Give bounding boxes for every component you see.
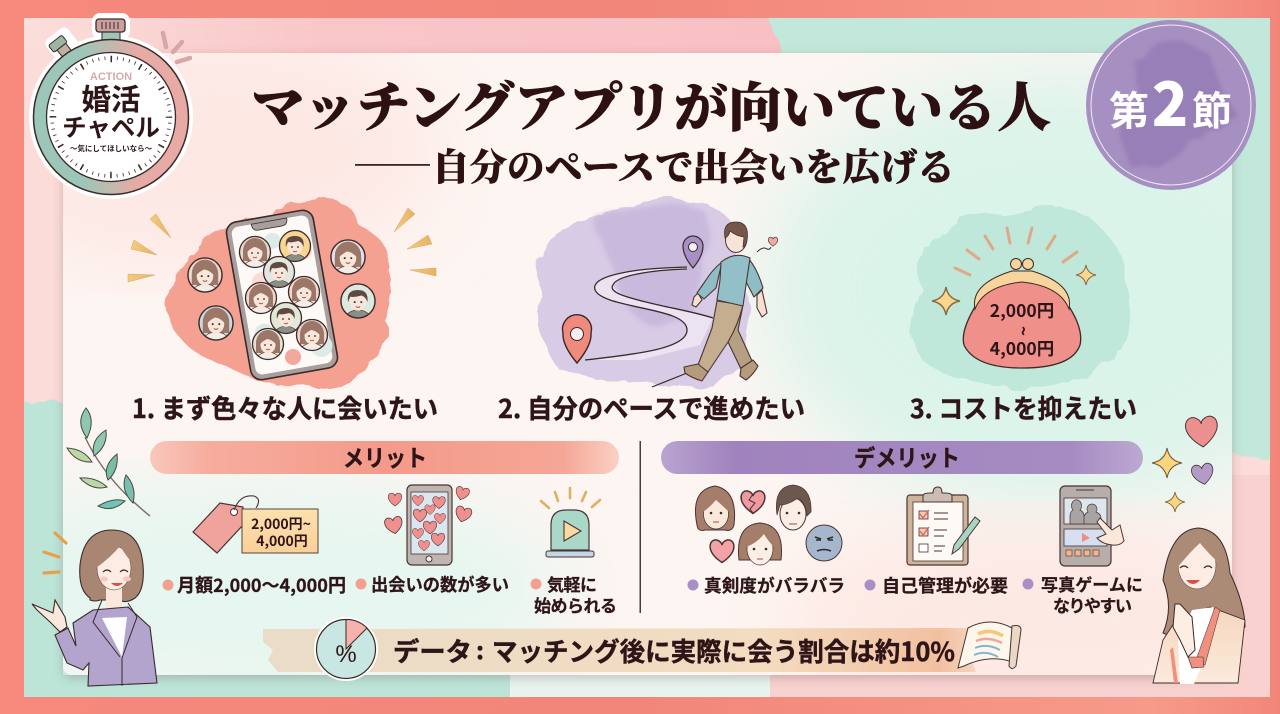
icon: tablet with photo game (1060, 486, 1124, 566)
woman face (695, 486, 735, 530)
gesture marks (44, 533, 66, 573)
merit bar (150, 439, 619, 474)
avatars outside phone (188, 240, 375, 343)
demerit 1 label: 真剣度がバラバラ (704, 573, 845, 598)
broken heart (741, 491, 765, 514)
icon: price tag: 4,000円 (256, 531, 308, 551)
pink heart (710, 540, 734, 562)
badge: section 2: 節 (1192, 79, 1232, 137)
illustration 3: coin purse (911, 205, 1132, 388)
pin: goal (683, 236, 703, 268)
merit 2 label: 出会いの数が多い (371, 572, 509, 597)
banner text: マッチング後に実際に会う割合は約10% (492, 632, 955, 669)
heading 1: 1. まず色々な人に会いたい (132, 389, 438, 426)
icon: clipboard (907, 487, 980, 565)
walking man (684, 222, 767, 381)
illustration 1: phone with many faces (128, 198, 436, 385)
character: woman presenting (32, 530, 157, 686)
banner text: : (476, 631, 484, 666)
badge: section 2: 第 (1109, 79, 1149, 137)
winding road (585, 267, 713, 360)
icon: price tag (193, 496, 318, 553)
logo: stopwatch (29, 13, 193, 199)
decorations: hearts and sparkles (1152, 416, 1219, 512)
heading 2: 2. 自分のペースで進めたい (498, 389, 805, 426)
title: マッチングアプリが向いている人 (251, 66, 1051, 142)
badge: section 2 (1086, 20, 1256, 190)
merit 3 label (530, 571, 617, 617)
unhappy face (806, 525, 842, 561)
icon: play alarm light (541, 488, 600, 557)
icon: leaf branch (67, 408, 150, 516)
purse price (990, 298, 1054, 361)
icon: mixed faces (695, 485, 842, 565)
heading 3: 3. コストを抑えたい (910, 389, 1137, 426)
subtitle: 自分のペースで出会いを広げる (432, 137, 955, 191)
merit 3 label: 始められる (534, 592, 617, 617)
demerit 3 label: 写真ゲームに (1041, 571, 1143, 596)
avatars on phone (240, 230, 328, 362)
watercolor blob: salmon (167, 198, 391, 385)
pie icon: % (335, 641, 357, 668)
logo: stopwatch: ACTION (90, 71, 132, 83)
logo: stopwatch: 〜気にしてほしいなら〜 (70, 143, 153, 154)
shadow line (652, 373, 687, 387)
second woman face (738, 523, 782, 565)
demerit bar (661, 439, 1143, 474)
rays right (394, 208, 436, 276)
demerit 3 label: なりやすい (1053, 592, 1132, 617)
illustration 2: winding path and walking man (538, 199, 778, 387)
merit 1 label: 月額2,000〜4,000円 (177, 572, 346, 598)
purse price: ~ (1012, 326, 1037, 336)
rays left (128, 214, 171, 282)
banner text: データ (393, 632, 472, 669)
purse price: 2,000円 (990, 298, 1054, 323)
sparkles (932, 265, 1096, 315)
icon: price tag: 2,000円~ (251, 514, 311, 534)
demerit 3 label (1022, 571, 1143, 617)
purse frame (974, 271, 1070, 309)
watercolor blob: mint (911, 205, 1132, 388)
rays (955, 228, 1077, 275)
merit bar: メリット (343, 439, 427, 473)
heart with squiggle (757, 237, 778, 252)
pie icon (314, 617, 378, 681)
logo: stopwatch: チャペル (62, 109, 160, 144)
merit 3 label: 気軽に (547, 571, 597, 596)
demerit bar: デメリット (854, 439, 960, 473)
data banner (263, 617, 1021, 681)
divider (640, 441, 641, 613)
pin: start (562, 315, 592, 363)
phone (225, 209, 339, 381)
icon: phone with hearts (384, 485, 473, 565)
purse price: 4,000円 (990, 336, 1054, 361)
logo: stopwatch: 婚活 (81, 77, 141, 119)
badge: section 2: 2 (1152, 57, 1188, 144)
clasp (1010, 258, 1034, 270)
demerit 2 label: 自己管理が必要 (882, 573, 1008, 598)
phone home button (285, 349, 301, 365)
man face (776, 485, 811, 530)
character: woman with hands together (1153, 528, 1245, 684)
purse body (963, 276, 1081, 368)
watercolor blob: purple (538, 199, 750, 387)
scroll icon (958, 622, 1021, 668)
